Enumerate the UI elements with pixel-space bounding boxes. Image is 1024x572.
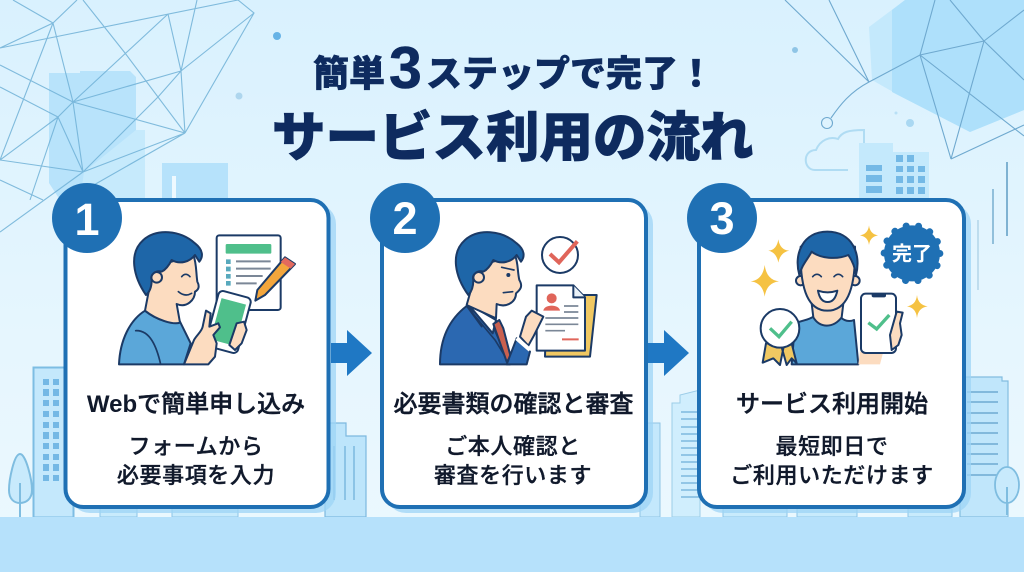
step 2 description: ご本人確認と: [445, 434, 581, 459]
step 2 number badge: [370, 183, 440, 253]
step 3 description: [730, 434, 934, 488]
step 2 description: [434, 434, 592, 488]
step 3 number badge: [687, 183, 757, 253]
background: cloud outline: [806, 130, 864, 170]
step 1 heading: Webで簡単申し込み: [87, 391, 305, 418]
title: 3: [389, 35, 422, 101]
title: ステップで完了！: [426, 53, 714, 94]
background: left buildings: [49, 71, 228, 203]
background: decorative dots: [236, 32, 914, 127]
step 2 heading: 必要書類の確認と審査: [394, 391, 634, 418]
background: building bases below the cards: [100, 505, 952, 517]
background: left network: [0, 0, 254, 232]
step 1 description: [117, 434, 275, 488]
step 3 number badge: 3: [709, 193, 735, 244]
arrow: step 2 to 3: [648, 330, 689, 376]
step 3 description: 最短即日で: [775, 434, 889, 459]
background: right top building: [859, 143, 929, 200]
step 3 heading: サービス利用開始: [736, 391, 928, 418]
background: bottom right building and tree: [960, 377, 1019, 517]
title: サービス利用の流れ: [272, 108, 754, 168]
step 1 description: フォームから: [129, 434, 263, 459]
step 2 number badge: 2: [392, 193, 418, 244]
panel: step 2: [370, 183, 653, 513]
title: [272, 35, 754, 168]
step 1 number badge: [52, 183, 122, 253]
arrow: step 1 to 2: [331, 330, 372, 376]
ground band: [0, 517, 1024, 572]
title: 簡単: [313, 53, 385, 94]
illustration: man with smartphone and form: [119, 232, 295, 364]
step 1 description: 必要事項を入力: [117, 463, 275, 488]
panel: step 1: [52, 183, 336, 513]
background: buildings between steps 2 and 3: [640, 390, 700, 517]
background: bottom left building and tree: [9, 368, 74, 518]
background: right polygon shape: [869, 0, 1024, 132]
background: right network: [785, 0, 1024, 159]
background: building between steps 1 and 2: [325, 423, 366, 517]
badge: 完了: 完了: [892, 242, 932, 265]
illustration: businessman reviewing documents: [440, 232, 597, 364]
step 1 number badge: 1: [74, 194, 100, 245]
badge: 完了: [884, 225, 940, 281]
illustration: smiling person with phone and badge: [751, 225, 940, 365]
background: thin vertical lines right: [978, 162, 1007, 290]
step 3 description: ご利用いただけます: [730, 463, 934, 488]
panel: step 3: [687, 183, 971, 513]
step 2 description: 審査を行います: [434, 463, 592, 488]
